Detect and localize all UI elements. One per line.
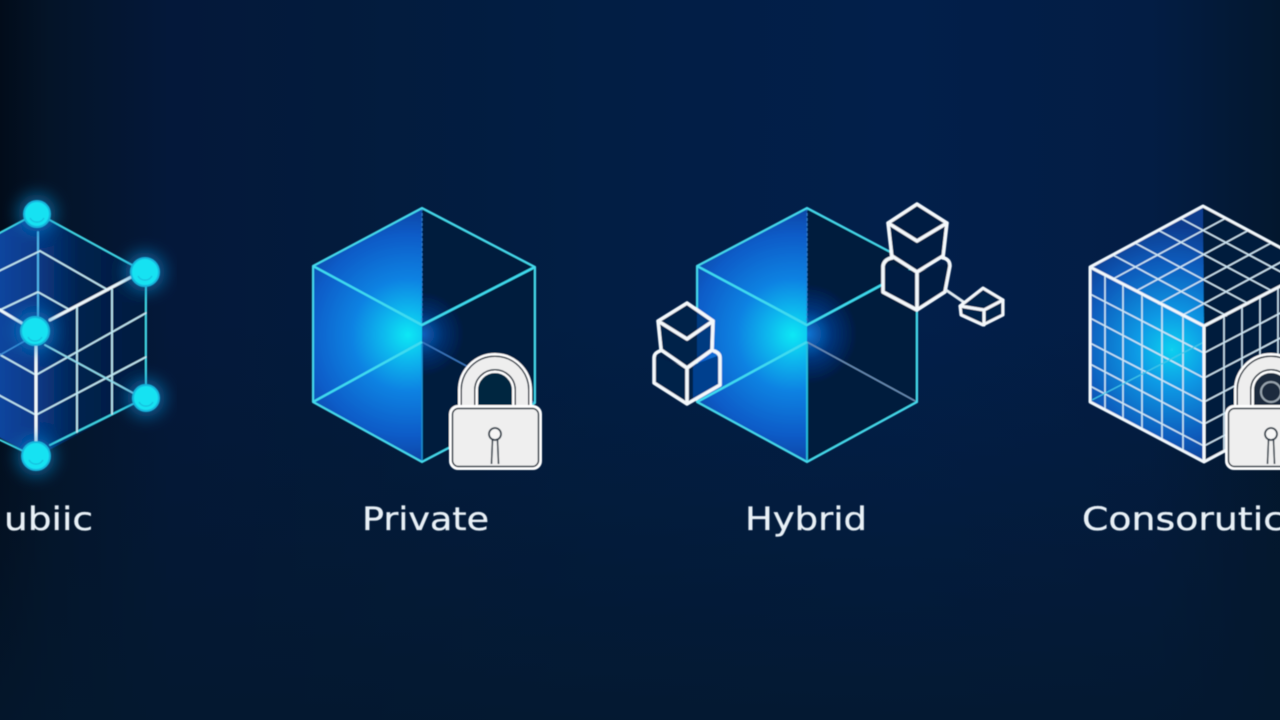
cube: hybrid xyxy=(697,208,917,462)
panel: public xyxy=(0,194,165,538)
cube faces: consortium xyxy=(1090,206,1280,462)
label: hybrid: Hybrid xyxy=(745,500,867,538)
grid lines: public xyxy=(0,213,146,452)
nodes: public xyxy=(15,194,165,476)
label: public: ubiic xyxy=(4,500,93,538)
panel: consortium xyxy=(1082,206,1280,538)
icon: left cube stack xyxy=(654,303,720,404)
icon: right cube stack xyxy=(883,204,950,310)
cube body: public xyxy=(0,213,146,457)
cube outline: consortium xyxy=(1090,206,1280,462)
panel: hybrid xyxy=(654,204,1003,538)
grid lines: consortium xyxy=(1090,218,1280,451)
icon: padlock consortium xyxy=(1225,363,1280,470)
connector: hybrid xyxy=(946,290,965,303)
icon: padlock xyxy=(449,363,542,470)
label: private: Private xyxy=(362,500,489,538)
cube: private xyxy=(313,208,535,462)
icon: small cube xyxy=(960,288,1003,325)
panel: private xyxy=(313,208,542,538)
label: consortium: Consorutic xyxy=(1082,500,1280,538)
